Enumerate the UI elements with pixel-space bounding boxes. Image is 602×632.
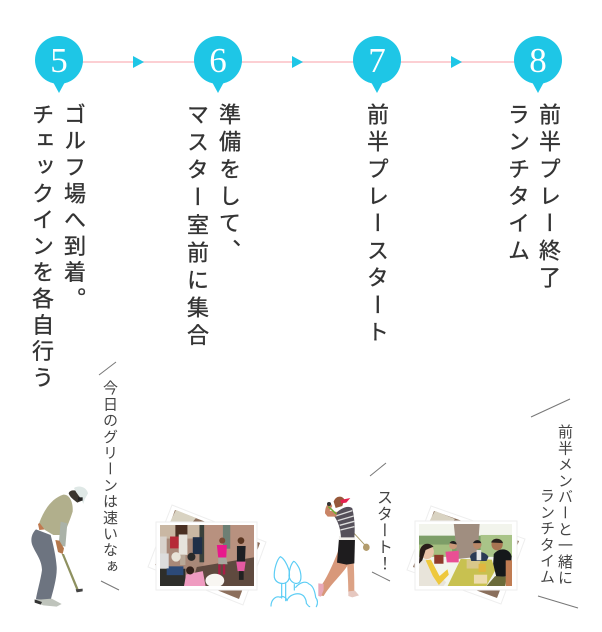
- note: lunch line 2: ランチタイム: [538, 488, 555, 585]
- icon: blue tree outline: [271, 557, 317, 607]
- note brackets: [99, 362, 578, 608]
- back photo 2: [407, 506, 525, 604]
- note: lunch line 1: 前半メンバーと一緒に: [556, 424, 573, 586]
- step 7 text: 前半プレースタート: [364, 103, 389, 348]
- step marker 5: [35, 36, 83, 93]
- step 5 text line 2: チェックインを各自行う: [29, 103, 54, 392]
- female golfer swinging: [318, 497, 370, 597]
- step 6 text line 1: 準備をして、: [216, 103, 241, 266]
- step marker 5: 5: [50, 41, 68, 80]
- step marker 6: 6: [209, 41, 227, 80]
- step marker 8: [514, 36, 562, 93]
- step 8 text line 2: ランチタイム: [505, 103, 530, 266]
- male golfer putting: [31, 487, 88, 607]
- step marker 6: [194, 36, 242, 93]
- note: start: スタート！: [374, 489, 391, 572]
- step marker 7: 7: [368, 41, 386, 80]
- step 8 text line 1: 前半プレー終了: [536, 103, 561, 293]
- back photo 1: [148, 505, 266, 605]
- front photo 1: group meeting: [156, 522, 257, 590]
- step marker 8: 8: [529, 41, 547, 80]
- timeline connector: [59, 56, 538, 68]
- note: green speed: 今日のグリーンは速いなぁ: [101, 380, 118, 574]
- step marker 7: [353, 36, 401, 93]
- front photo 2: lunch table: [415, 521, 517, 590]
- step 6 text line 2: マスター室前に集合: [184, 103, 209, 351]
- step 5 text line 1: ゴルフ場へ到着。: [61, 103, 86, 313]
